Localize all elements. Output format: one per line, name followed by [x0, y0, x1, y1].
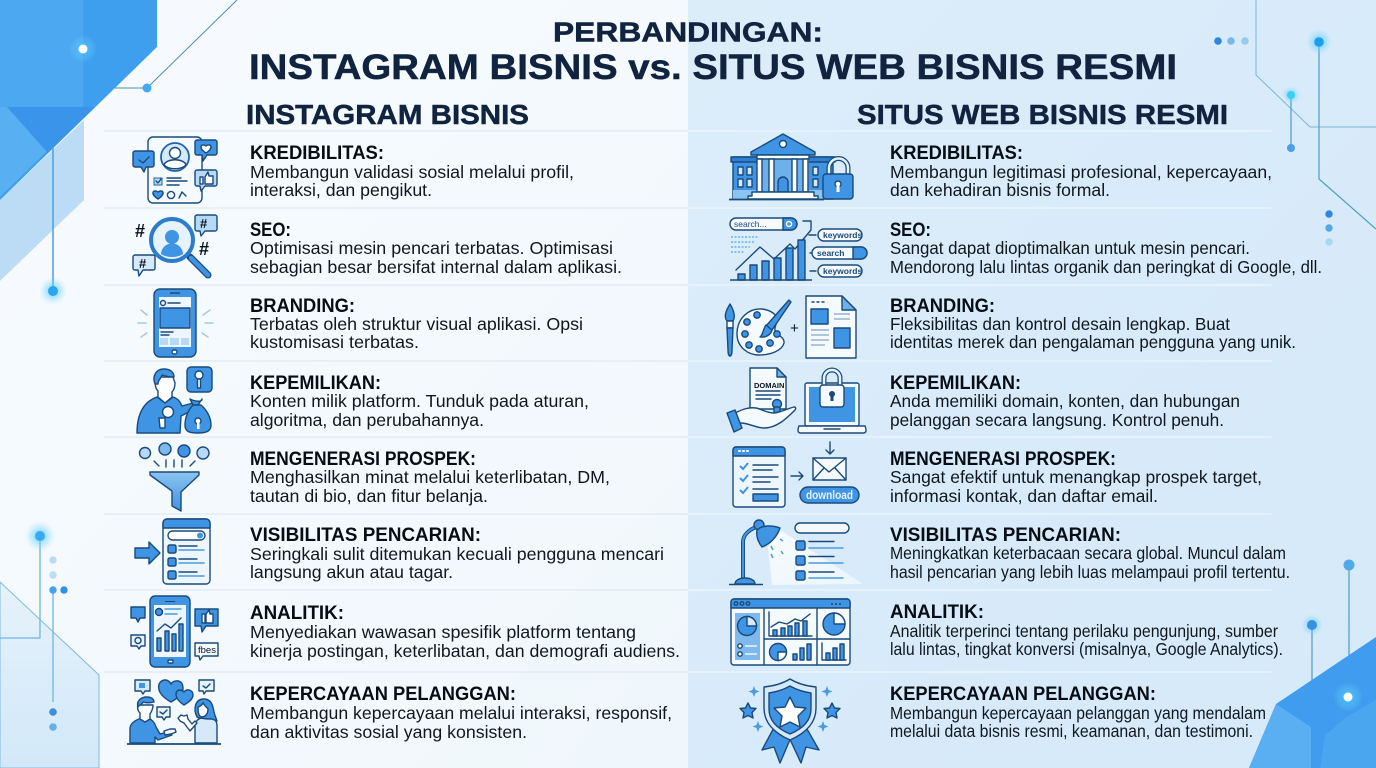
- text: seo situs web: Mendorong lalu lintas organik dan peringkat di Google, dll.: [890, 257, 1322, 277]
- text: analitik instagram: ANALITIK:: [250, 603, 344, 624]
- icon: form, envelope and download button: download: [806, 490, 853, 502]
- text: kepemilikan situs web: [890, 373, 1240, 430]
- text: kepemilikan situs web: Anda memiliki domain, konten, dan hubungan: [890, 391, 1240, 411]
- text: kredibilitas situs web: Membangun legitimasi profesional, kepercayaan,: [890, 162, 1272, 182]
- text: kredibilitas situs web: dan kehadiran bisnis formal.: [890, 180, 1110, 200]
- icon: phone with analytics: fbes: [198, 645, 216, 656]
- text: kepercayaan pelanggan situs web: melalui data bisnis resmi, keamanan, dan testimoni.: [890, 721, 1253, 741]
- icon: search bars, keywords and growth chart: keywords: [823, 266, 862, 276]
- text: analitik situs web: Analitik terperinci tentang perilaku pengunjung, sumber: [890, 621, 1278, 641]
- icon: bank building with padlock: [729, 134, 853, 200]
- row: kredibilitas instagram: [133, 137, 574, 203]
- icon: search bars, keywords and growth chart: keywords: [823, 230, 862, 240]
- text: visibilitas pencarian instagram: langsung akun atau tagar.: [250, 562, 453, 582]
- icon: form, envelope and download button: [733, 442, 859, 507]
- icon: search bars, keywords and growth chart: search: [817, 248, 844, 258]
- text: seo situs web: SEO:: [890, 220, 931, 241]
- row: mengenerasi prospek situs web: [733, 442, 1262, 507]
- text: analitik instagram: Menyediakan wawasan spesifik platform tentang: [250, 622, 636, 642]
- text: mengenerasi prospek situs web: MENGENERASI PROSPEK:: [890, 449, 1116, 470]
- text: seo situs web: [890, 220, 1322, 277]
- row: kredibilitas situs web: [729, 134, 1272, 200]
- text: branding instagram: [250, 296, 583, 352]
- decoration: top-right lines and nodes: [1214, 0, 1376, 246]
- text: kepercayaan pelanggan situs web: KEPERCAYAAN PELANGGAN:: [890, 684, 1156, 705]
- text: branding instagram: kustomisasi terbatas.: [250, 332, 419, 352]
- text: kepemilikan instagram: Konten milik platform. Tunduk pada aturan,: [250, 391, 589, 411]
- decoration: bottom-left shapes and nodes: [0, 521, 99, 768]
- column heading: instagram bisnis: INSTAGRAM BISNIS: [246, 99, 529, 130]
- icon: domain document in hand and laptop with padlock: [727, 368, 866, 433]
- row: kepemilikan situs web: [727, 368, 1240, 433]
- icon: magnifier with hashtags: #: [199, 239, 209, 259]
- text: branding situs web: BRANDING:: [890, 296, 995, 317]
- icon: magnifier with hashtags: #: [135, 221, 145, 241]
- icon: social profile card: [133, 137, 217, 203]
- text: visibilitas pencarian situs web: VISIBILITAS PENCARIAN:: [890, 525, 1121, 546]
- text: visibilitas pencarian instagram: [250, 525, 664, 582]
- icon: phone with analytics: [131, 596, 218, 667]
- text: analitik instagram: kinerja postingan, keterlibatan, dan demografi audiens.: [250, 641, 680, 661]
- text: seo instagram: SEO:: [250, 220, 291, 241]
- title line 1: PERBANDINGAN:: [553, 16, 823, 48]
- text: kepercayaan pelanggan instagram: [250, 684, 672, 742]
- row: branding instagram: [138, 289, 583, 357]
- text: kepercayaan pelanggan situs web: [890, 684, 1266, 741]
- row: branding situs web: [725, 296, 1296, 358]
- row: seo instagram: [133, 215, 622, 277]
- text: mengenerasi prospek instagram: tautan di bio, dan fitur belanja.: [250, 486, 488, 506]
- text: visibilitas pencarian instagram: Seringkali sulit ditemukan kecuali pengguna mencari: [250, 544, 664, 564]
- text: kepercayaan pelanggan instagram: Membangun kepercayaan melalui interaksi, responsif,: [250, 703, 672, 723]
- decoration: bottom-right shapes and nodes: [1249, 560, 1376, 768]
- text: branding situs web: identitas merek dan pengalaman pengguna yang unik.: [890, 332, 1296, 352]
- title: [249, 16, 1177, 87]
- row: analitik situs web: [731, 599, 1283, 665]
- text: seo situs web: Sangat dapat dioptimalkan untuk mesin pencari.: [890, 238, 1250, 258]
- icon: palette, brush and document: [725, 296, 856, 358]
- panel: situs web bisnis resmi: [725, 99, 1322, 763]
- icon: phone with post layout: [138, 289, 213, 357]
- text: seo instagram: Optimisasi mesin pencari terbatas. Optimisasi: [250, 238, 613, 258]
- text: kredibilitas instagram: KREDIBILITAS:: [250, 143, 384, 164]
- text: seo instagram: sebagian besar bersifat internal dalam aplikasi.: [250, 257, 622, 277]
- panel: instagram bisnis: [127, 99, 680, 744]
- icon: people exchanging trust: [127, 680, 221, 744]
- title line 2: INSTAGRAM BISNIS vs. SITUS WEB BISNIS RESMI: [249, 48, 1177, 87]
- icon: desk lamp shining on list: [729, 520, 863, 585]
- text: branding situs web: [890, 296, 1296, 352]
- text: kepercayaan pelanggan instagram: KEPERCAYAAN PELANGGAN:: [250, 684, 516, 705]
- icon: domain document in hand and laptop with padlock: DOMAIN: [754, 381, 784, 390]
- text: analitik situs web: [890, 602, 1283, 659]
- icon: lead funnel: [140, 443, 209, 511]
- column heading: situs web bisnis resmi: SITUS WEB BISNIS RESMI: [857, 99, 1228, 130]
- text: mengenerasi prospek instagram: MENGENERASI PROSPEK:: [250, 449, 476, 470]
- text: kredibilitas situs web: [890, 143, 1272, 200]
- text: mengenerasi prospek instagram: [250, 449, 610, 506]
- text: mengenerasi prospek instagram: Menghasilkan minat melalui keterlibatan, DM,: [250, 467, 610, 487]
- icon: shield badge with stars: [740, 679, 840, 763]
- text: kepemilikan situs web: pelanggan secara langsung. Kontrol penuh.: [890, 410, 1224, 430]
- icon: magnifier with hashtags: #: [200, 216, 208, 231]
- text: branding instagram: BRANDING:: [250, 296, 355, 317]
- text: kepercayaan pelanggan situs web: Membangun kepercayaan pelanggan yang mendalam: [890, 703, 1266, 723]
- icon: person with key and money bag: [137, 367, 212, 433]
- text: kepemilikan instagram: [250, 373, 589, 430]
- icon: search bars, keywords and growth chart: search...: [734, 219, 767, 229]
- row: kepercayaan pelanggan situs web: [740, 679, 1266, 763]
- text: visibilitas pencarian situs web: Meningkatkan keterbacaan secara global. Muncul dalam: [890, 543, 1286, 563]
- text: visibilitas pencarian situs web: [890, 525, 1290, 582]
- row: kepercayaan pelanggan instagram: [127, 680, 672, 744]
- icon: search bars, keywords and growth chart: [730, 218, 867, 280]
- row: mengenerasi prospek instagram: [140, 443, 610, 511]
- text: visibilitas pencarian instagram: VISIBILITAS PENCARIAN:: [250, 525, 481, 546]
- icon: magnifier with hashtags: #: [139, 256, 147, 271]
- text: seo instagram: [250, 220, 622, 277]
- text: branding instagram: Terbatas oleh struktur visual aplikasi. Opsi: [250, 314, 583, 334]
- decoration: top-left shapes and nodes: [0, 0, 237, 305]
- text: analitik situs web: lalu lintas, tingkat konversi (misalnya, Google Analytics).: [890, 639, 1283, 659]
- icon: palette, brush and document: +: [790, 320, 799, 337]
- icon: magnifier with hashtags: [133, 215, 217, 276]
- row: visibilitas pencarian situs web: [729, 520, 1290, 585]
- row: kepemilikan instagram: [137, 367, 589, 433]
- text: visibilitas pencarian situs web: hasil pencarian yang lebih luas melampaui profil tertentu.: [890, 562, 1290, 582]
- text: kepemilikan situs web: KEPEMILIKAN:: [890, 373, 1021, 394]
- text: mengenerasi prospek situs web: informasi kontak, dan daftar email.: [890, 486, 1158, 506]
- text: kredibilitas situs web: KREDIBILITAS:: [890, 143, 1023, 164]
- text: analitik instagram: [250, 603, 680, 661]
- text: branding situs web: Fleksibilitas dan kontrol desain lengkap. Buat: [890, 314, 1230, 334]
- text: mengenerasi prospek situs web: [890, 449, 1262, 506]
- text: kredibilitas instagram: interaksi, dan pengikut.: [250, 180, 432, 200]
- text: mengenerasi prospek situs web: Sangat efektif untuk menangkap prospek target,: [890, 467, 1262, 487]
- text: kepemilikan instagram: algoritma, dan perubahannya.: [250, 410, 484, 430]
- text: analitik situs web: ANALITIK:: [890, 602, 984, 623]
- text: kredibilitas instagram: [250, 143, 574, 200]
- row: analitik instagram: [131, 596, 680, 667]
- text: kepemilikan instagram: KEPEMILIKAN:: [250, 373, 381, 394]
- text: kredibilitas instagram: Membangun validasi sosial melalui profil,: [250, 162, 574, 182]
- icon: search results page with arrow: [135, 519, 210, 584]
- row: visibilitas pencarian instagram: [135, 519, 664, 584]
- row: seo situs web: [730, 218, 1322, 280]
- icon: analytics dashboard: [731, 599, 850, 665]
- text: kepercayaan pelanggan instagram: dan aktivitas sosial yang konsisten.: [250, 722, 527, 742]
